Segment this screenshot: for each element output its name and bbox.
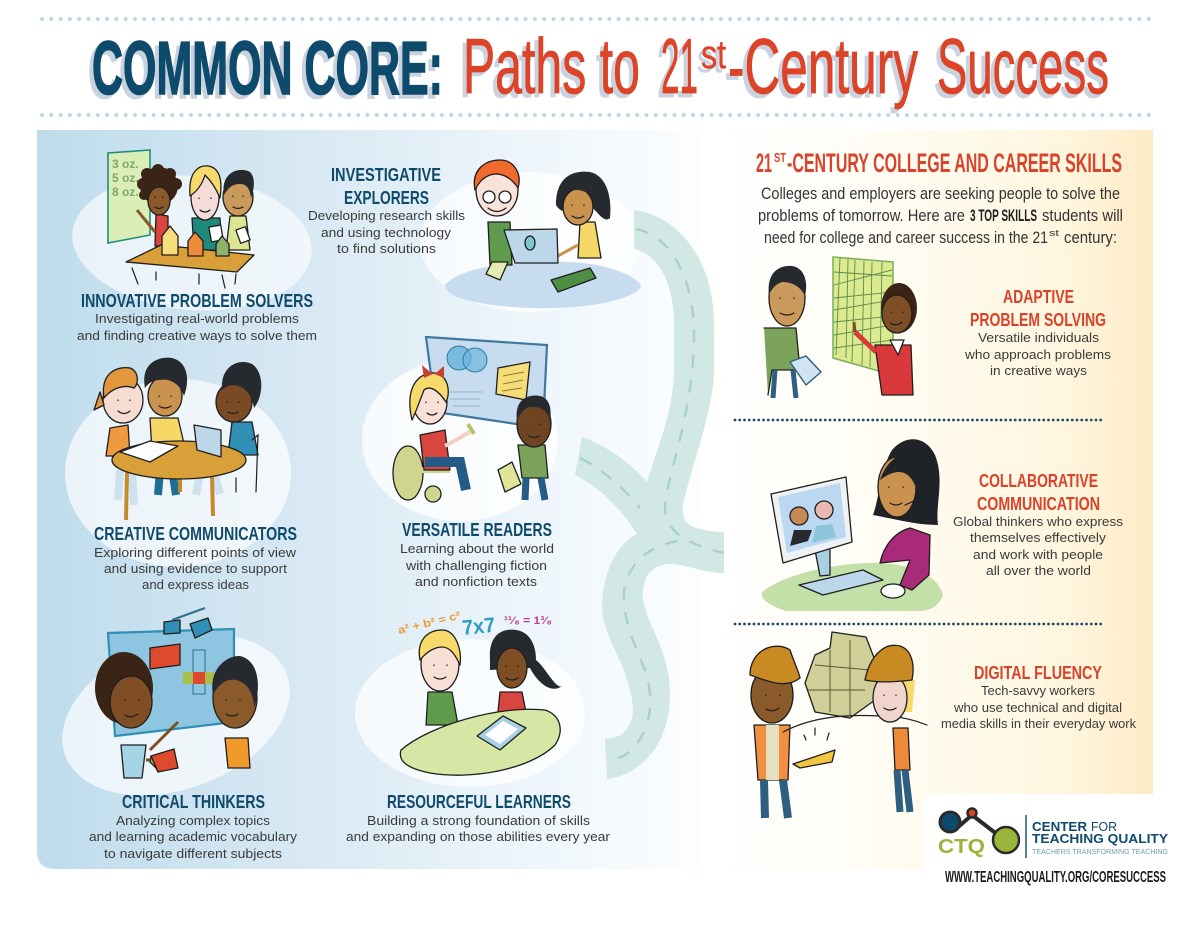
title: st <box>701 33 726 77</box>
text: investigative description: and using technology <box>321 225 452 240</box>
blob: resourceful <box>355 639 585 787</box>
icon: wheelchair <box>393 446 450 502</box>
text: versatile description <box>400 541 554 589</box>
text: collaborative description: Global thinkers who express <box>953 514 1124 529</box>
panel: student paths background <box>37 130 730 869</box>
text: skills intro: century: <box>1064 228 1117 247</box>
icon: projection board <box>108 629 234 736</box>
text: skills intro: problems of tomorrow. Here are <box>758 206 965 225</box>
panel: skills background <box>700 130 1153 870</box>
icon: mouse <box>881 584 905 598</box>
title <box>88 22 1109 114</box>
icon: table with cartons <box>126 226 254 288</box>
icon: notebook <box>498 462 521 492</box>
text: adaptive description: in creative ways <box>990 363 1088 378</box>
icon: projector <box>164 608 212 638</box>
title: Paths to <box>459 26 636 114</box>
icon: measurement board <box>108 150 150 243</box>
icon: city map <box>833 257 893 375</box>
heading: investigative explorers <box>331 165 441 208</box>
text: critical description: and learning academic vocabulary <box>89 829 298 844</box>
text: innovative description: and finding creative ways to solve them <box>77 328 317 343</box>
blob: investigative <box>420 172 640 312</box>
blob: innovative <box>67 166 317 320</box>
icon: table <box>445 262 641 308</box>
text: versatile description: with challenging fiction <box>405 558 547 573</box>
dotted rule: top <box>42 17 1153 21</box>
text: adaptive description: who approach problems <box>964 347 1112 362</box>
icon: monitor <box>771 477 852 576</box>
heading: creative communicators: CREATIVE COMMUNICATORS <box>94 524 297 544</box>
text: creative description: and using evidence to support <box>104 561 287 576</box>
icon: round table <box>112 441 246 520</box>
icon: laptop <box>194 425 221 457</box>
heading: adaptive problem solving: PROBLEM SOLVING <box>970 310 1106 330</box>
icon: building <box>805 632 878 718</box>
blob: versatile <box>362 359 558 521</box>
text: creative description <box>94 545 297 592</box>
text: resourceful description <box>346 813 611 844</box>
illustration: adaptive problem solving <box>764 257 917 398</box>
text: adaptive description: Versatile individuals <box>978 330 1100 345</box>
road path connecting students to skills <box>575 210 724 779</box>
heading: 21st-century college and career skills: ST <box>774 150 786 165</box>
heading: adaptive problem solving <box>970 287 1106 330</box>
heading: 21st-century college and career skills: 21 <box>756 148 772 178</box>
illustration: digital fluency <box>750 632 927 818</box>
text: skills intro: students will <box>1042 206 1123 225</box>
icon: measurement board: 5 oz. <box>112 171 139 185</box>
text: organisation name <box>1032 819 1168 846</box>
blob: creative <box>65 379 291 567</box>
icon: laptop <box>504 229 558 263</box>
text: organisation name: CENTER <box>1032 819 1088 834</box>
icon: cube <box>150 749 178 772</box>
text: adaptive description <box>964 330 1112 378</box>
illustration: resourceful learners <box>397 610 562 775</box>
icon: measurement board: 8 oz. <box>112 185 139 199</box>
text: creative description: Exploring different points of view <box>94 545 297 560</box>
text: skills intro <box>758 184 1123 247</box>
icon: CTQ network <box>940 808 1019 853</box>
title: st <box>697 37 722 81</box>
icon: book <box>551 268 596 292</box>
icon: open book <box>120 441 178 462</box>
blob: critical <box>40 605 312 825</box>
title: -Century <box>724 26 914 114</box>
text: innovative description: Investigating real-world problems <box>95 311 300 326</box>
text: tagline: TEACHERS TRANSFORMING TEACHING <box>1032 847 1168 856</box>
icon: worker right <box>865 645 915 812</box>
logo: CTQ panel <box>923 794 1200 890</box>
text: creative description: and express ideas <box>142 577 250 592</box>
icon: tablet <box>790 356 821 385</box>
text: critical description <box>89 813 298 861</box>
text: collaborative description <box>953 514 1124 578</box>
heading: digital fluency: DIGITAL FLUENCY <box>974 663 1102 683</box>
title: COMMON CORE: <box>92 26 443 110</box>
text: skills intro: need for college and career success in the 21 <box>764 228 1048 247</box>
text: investigative description: Developing research skills <box>308 208 466 223</box>
icon: measurement board: 3 oz. <box>112 157 139 171</box>
text: versatile description: Learning about the world <box>400 541 554 556</box>
text: resourceful description: and expanding on those abilities every year <box>346 829 611 844</box>
dotted separator <box>735 623 1101 625</box>
icon: tablet <box>477 716 526 750</box>
illustration: versatile readers <box>393 337 551 502</box>
text: digital description: who use technical and digital <box>953 700 1122 715</box>
text: skills intro: Colleges and employers are seeking people to solve the <box>761 184 1120 203</box>
text: digital description: media skills in their everyday work <box>941 716 1136 731</box>
text: innovative description <box>77 311 317 343</box>
heading: adaptive problem solving: ADAPTIVE <box>1003 287 1074 307</box>
heading: innovative problem solvers: INNOVATIVE PROBLEM SOLVERS <box>81 291 313 311</box>
heading: investigative explorers: INVESTIGATIVE <box>331 165 441 185</box>
illustration: innovative problem solvers <box>108 150 254 288</box>
text: resourceful description: Building a strong foundation of skills <box>367 813 591 828</box>
text: investigative description: to find solutions <box>337 241 437 256</box>
dotted separator <box>735 419 1101 421</box>
title: COMMON CORE: <box>88 30 439 114</box>
text: skills intro: 3 TOP SKILLS <box>970 206 1037 225</box>
text: organisation name: TEACHING QUALITY <box>1032 831 1168 846</box>
icon: yellow tablet <box>793 750 835 768</box>
text: digital description <box>941 683 1136 731</box>
heading: resourceful learners: RESOURCEFUL LEARNERS <box>387 792 571 812</box>
icon: presentation board <box>426 337 547 428</box>
title: 21 <box>661 22 698 110</box>
dotted rule: under title <box>42 113 1153 117</box>
icon: worker left <box>750 646 800 818</box>
text: collaborative description: and work with people <box>973 547 1103 562</box>
text: collaborative description: all over the world <box>986 563 1091 578</box>
text: skills intro: st <box>1049 228 1060 238</box>
heading: collaborative communication <box>977 471 1100 514</box>
illustration: critical thinkers <box>95 608 258 778</box>
text: critical description: Analyzing complex topics <box>116 813 271 828</box>
text: collaborative description: themselves effectively <box>970 530 1107 545</box>
title: 21 <box>657 26 694 114</box>
text: versatile description: and nonfiction texts <box>415 574 538 589</box>
heading: collaborative communication: COMMUNICATION <box>977 494 1100 514</box>
text: critical description: to navigate different subjects <box>104 846 283 861</box>
illustration: creative communicators <box>94 358 261 520</box>
text: CTQ initials: CTQ <box>938 836 985 858</box>
title: Paths to <box>463 22 640 110</box>
illustration: investigative explorers <box>445 160 641 308</box>
math: fraction: ¹¹⁄₈ = 1³⁄₈ <box>504 615 552 627</box>
illustration: collaborative communication <box>762 439 943 611</box>
math: pythagorean formula: a² + b² = c² <box>397 610 462 637</box>
math: multiplication: 7x7 <box>461 614 496 640</box>
icon: desk <box>762 563 943 611</box>
heading: collaborative communication: COLLABORATIVE <box>979 471 1098 491</box>
text: organisation name: FOR <box>1091 819 1117 834</box>
icon: keyboard <box>799 570 883 595</box>
icon: paper <box>486 262 508 280</box>
title: -Century <box>728 22 918 110</box>
heading: investigative explorers: EXPLORERS <box>344 188 429 208</box>
icon: green table <box>400 709 560 775</box>
text: investigative description <box>308 208 466 256</box>
heading: critical thinkers: CRITICAL THINKERS <box>122 792 265 812</box>
text: digital description: Tech-savvy workers <box>981 683 1095 698</box>
heading: versatile readers: VERSATILE READERS <box>402 520 552 540</box>
